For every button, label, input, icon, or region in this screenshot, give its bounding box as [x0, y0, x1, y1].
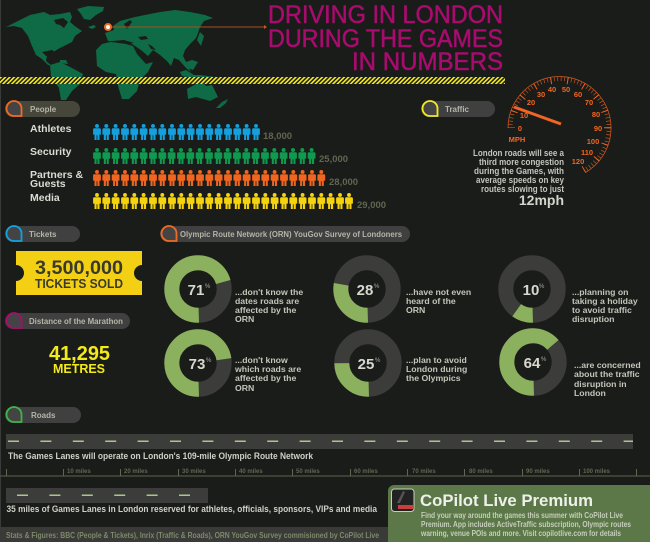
mileage scale: 80 miles	[469, 469, 493, 475]
traffic text: 12mph	[519, 192, 564, 208]
heading: people: People	[30, 105, 57, 114]
heading: distance of the marathon: Distance of the Marathon	[29, 317, 123, 326]
text: 71 percent	[235, 287, 303, 324]
media row: Media	[30, 192, 60, 204]
speed labels: 70	[585, 98, 593, 107]
mileage scale: 90 miles	[526, 469, 550, 475]
mileage scale: 70 miles	[412, 469, 436, 475]
text: 73 percent: ...don't know	[235, 355, 288, 365]
media row	[30, 192, 386, 211]
mileage scale: 10 miles	[67, 469, 91, 475]
ticket	[16, 251, 142, 295]
footer: sources: Stats & Figures: BBC (People & Tickets), Inrix (Traffic & Roads), ORN YouGov Survey commisioned by CoPilot Live	[6, 531, 379, 540]
road: 109 miles	[6, 434, 633, 449]
athletes row: 18,000	[263, 131, 292, 142]
mileage scale: 40 miles	[239, 469, 263, 475]
text: 73 percent: affected by the	[235, 373, 296, 383]
title: DURING THE GAMES	[268, 25, 503, 53]
marathon figure: 41,295	[49, 343, 110, 365]
traffic text	[473, 148, 565, 208]
text: 28 percent: ORN	[406, 305, 425, 315]
donut: 71 percent: 71	[188, 282, 204, 299]
text: 10 percent: ...planning on	[572, 287, 628, 297]
media row: 29,000	[357, 200, 386, 211]
speed labels: 120	[572, 157, 584, 166]
mileage scale: 20 miles	[124, 469, 148, 475]
text: 28 percent: heard of the	[406, 296, 456, 306]
icon: app	[392, 489, 414, 512]
text: 71 percent: ORN	[235, 314, 254, 324]
text: 25 percent	[406, 355, 467, 383]
donut: 10 percent: %	[539, 284, 545, 290]
heading: tickets: Tickets	[29, 230, 57, 239]
heading: traffic: Traffic	[445, 105, 470, 114]
speed labels: 90	[594, 124, 602, 133]
ticket: TICKETS SOLD	[35, 276, 123, 291]
text: 64 percent	[574, 360, 641, 398]
text: 73 percent: ORN	[235, 383, 254, 393]
speed labels: 60	[574, 90, 582, 99]
heading: people	[5, 101, 80, 117]
ticket: 3,500,000	[35, 258, 123, 279]
footer: sources	[0, 527, 390, 542]
donut: 73 percent: %	[206, 358, 212, 364]
text: 64 percent: disruption in	[574, 379, 627, 389]
text: 64 percent: London	[574, 388, 606, 398]
donut: 25 percent: 25	[358, 356, 374, 373]
donut: 64 percent: %	[541, 357, 547, 363]
world map	[6, 6, 228, 108]
mileage scale: 60 miles	[354, 469, 378, 475]
mileage scale	[0, 469, 650, 476]
donut: 25 percent: %	[375, 358, 381, 364]
donut: 64 percent: 64	[524, 355, 541, 372]
route arrow from London to title	[105, 24, 267, 30]
pictogram chart: people	[30, 123, 386, 211]
speed labels: 20	[527, 98, 535, 107]
product description	[420, 511, 631, 538]
caption: 35 miles: 35 miles of Games Lanes in London reserved for athletes, officials, sponsors, VIPs and media	[6, 504, 378, 515]
security row: 25,000	[319, 154, 348, 165]
speed labels: 100	[587, 137, 599, 146]
text: 73 percent	[234, 355, 301, 393]
traffic text: during the Games, with	[474, 166, 564, 176]
mileage scale: 50 miles	[296, 469, 320, 475]
donut: 10 percent: 10	[523, 282, 539, 299]
heading: tickets	[5, 226, 80, 242]
speedometer	[508, 77, 611, 173]
donut: 73 percent	[172, 337, 224, 389]
panel: CoPilot Live Premium	[388, 485, 650, 542]
donut: 71 percent	[172, 263, 224, 315]
text: 25 percent: London during	[406, 364, 467, 374]
donut: 71 percent: %	[205, 284, 211, 290]
partners and guests row: 28,000	[329, 177, 358, 188]
needle	[514, 107, 561, 124]
text: 64 percent: about the traffic	[574, 369, 640, 379]
heading: ORN survey: Olympic Route Network (ORN) YouGov Survey of Londoners	[180, 230, 403, 239]
heading: roads	[5, 407, 81, 423]
text: 10 percent: taking a holiday	[572, 296, 638, 306]
partners and guests row: Guests	[30, 178, 66, 190]
donut: 25 percent	[342, 337, 394, 389]
hazard stripe	[0, 77, 505, 84]
speed labels: 110	[581, 148, 593, 157]
text: 28 percent	[406, 287, 471, 315]
donut: 10 percent	[506, 263, 558, 315]
text: 10 percent: disruption	[572, 314, 614, 324]
athletes row: Athletes	[30, 123, 72, 135]
athletes row	[30, 123, 292, 142]
caption: 109 miles: The Games Lanes will operate on London's 109-mile Olympic Route Network	[8, 451, 314, 462]
title	[268, 1, 503, 76]
product name: CoPilot Live Premium	[420, 491, 593, 510]
gauge ticks	[508, 77, 611, 173]
text: 28 percent: ...have not even	[406, 287, 471, 297]
title: IN NUMBERS	[352, 48, 503, 76]
traffic text: London roads will see a	[473, 148, 565, 158]
traffic text: routes slowing to just	[481, 184, 564, 194]
partners and guests row: Partners &	[30, 169, 84, 181]
speed labels: 40	[548, 85, 556, 94]
text: 71 percent: ...don't know the	[235, 287, 303, 297]
donut: 28 percent: 28	[357, 282, 373, 299]
speed labels: 10	[520, 111, 528, 120]
text: 25 percent: the Olympics	[406, 373, 461, 383]
security row: Security	[30, 146, 72, 158]
speed labels: 80	[592, 110, 600, 119]
mph unit: MPH	[509, 135, 525, 144]
text: 25 percent: ...plan to avoid	[406, 355, 467, 365]
heading: distance of the marathon	[5, 313, 130, 329]
speed labels: 0	[518, 124, 522, 133]
text: 71 percent: affected by the	[235, 305, 296, 315]
text: 10 percent	[572, 287, 638, 324]
mileage scale: 100 miles	[583, 469, 611, 475]
donut: 28 percent: %	[374, 284, 380, 290]
security row	[30, 146, 348, 165]
donut: 73 percent: 73	[189, 356, 205, 373]
mileage scale: 30 miles	[182, 469, 206, 475]
traffic text: average speeds on key	[476, 175, 564, 185]
road: 35 miles	[6, 488, 208, 503]
title: DRIVING IN LONDON	[268, 1, 503, 29]
speed labels: 50	[562, 85, 570, 94]
text: 10 percent: to avoid traffic	[572, 305, 632, 315]
heading: traffic	[421, 101, 495, 117]
heading: ORN survey	[160, 226, 410, 242]
marathon figure	[49, 343, 110, 376]
heading: roads: Roads	[31, 411, 56, 420]
partners and guests row	[30, 169, 358, 190]
donut: 28 percent	[341, 263, 393, 315]
text: 73 percent: which roads are	[234, 364, 301, 374]
marathon figure: METRES	[53, 361, 105, 376]
text: 64 percent: ...are concerned	[574, 360, 641, 370]
donut: 64 percent	[507, 336, 559, 388]
speed labels	[518, 85, 602, 166]
traffic text: third more congestion	[479, 157, 564, 167]
speed labels: 30	[537, 90, 545, 99]
text: 71 percent: dates roads are	[235, 296, 299, 306]
